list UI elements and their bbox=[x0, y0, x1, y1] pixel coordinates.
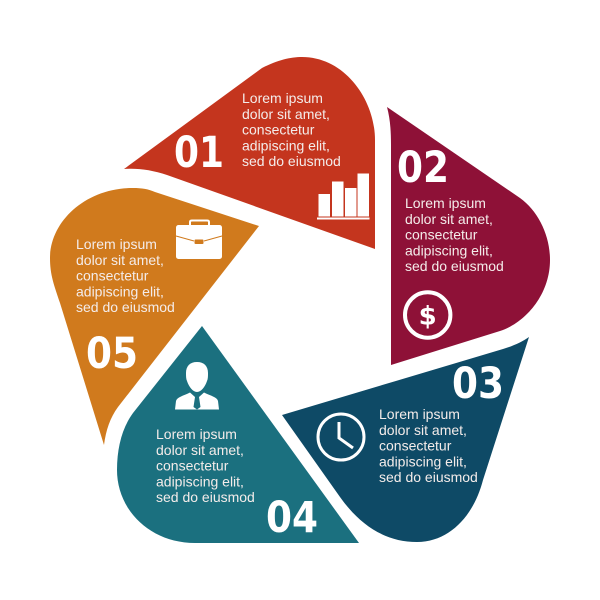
text block 04: adipiscing elit, bbox=[156, 473, 244, 489]
text block 05: sed do eiusmod bbox=[76, 299, 175, 315]
text block 01: adipiscing elit, bbox=[242, 137, 330, 153]
icon: clock bbox=[318, 414, 364, 460]
panel: 05 orange bbox=[50, 188, 259, 445]
text block 03: Lorem ipsum bbox=[379, 406, 460, 422]
icon: dollar coin: $ bbox=[419, 302, 437, 332]
number 04: 04 bbox=[266, 493, 318, 543]
text block 02: dolor sit amet, bbox=[405, 211, 493, 227]
text block 05: dolor sit amet, bbox=[76, 252, 164, 268]
text block 05: Lorem ipsum bbox=[76, 236, 157, 252]
panel: 03 dark teal bbox=[282, 337, 529, 542]
number 01: 01 bbox=[174, 128, 224, 178]
text block 01: dolor sit amet, bbox=[242, 106, 330, 122]
number 03: 03 bbox=[452, 359, 504, 409]
text block 02: Lorem ipsum bbox=[405, 195, 486, 211]
icon: businessman bbox=[175, 362, 219, 410]
icon: bar chart bbox=[317, 174, 370, 220]
text block 05: adipiscing elit, bbox=[76, 283, 164, 299]
text block 04: consectetur bbox=[156, 458, 229, 474]
text block 03: dolor sit amet, bbox=[379, 422, 467, 438]
panel: 04 teal bbox=[117, 326, 359, 543]
text block 01: Lorem ipsum bbox=[242, 90, 323, 106]
icon: dollar coin bbox=[405, 292, 450, 338]
panel: 01 red bbox=[124, 57, 375, 249]
text block 02: consectetur bbox=[405, 227, 478, 243]
number 02: 02 bbox=[397, 143, 449, 193]
text block 04: sed do eiusmod bbox=[156, 489, 255, 505]
text block 01: sed do eiusmod bbox=[242, 153, 341, 169]
text block 05: consectetur bbox=[76, 268, 149, 284]
panel: 02 maroon bbox=[387, 107, 550, 365]
text block 03: consectetur bbox=[379, 438, 452, 454]
text block 03: sed do eiusmod bbox=[379, 469, 478, 485]
text block 02: sed do eiusmod bbox=[405, 258, 504, 274]
icon: briefcase bbox=[176, 220, 222, 259]
text block 04: dolor sit amet, bbox=[156, 442, 244, 458]
text block 02: adipiscing elit, bbox=[405, 242, 493, 258]
text block 01: consectetur bbox=[242, 122, 315, 138]
text block 03: adipiscing elit, bbox=[379, 453, 467, 469]
number 05: 05 bbox=[86, 329, 138, 379]
text block 04: Lorem ipsum bbox=[156, 426, 237, 442]
